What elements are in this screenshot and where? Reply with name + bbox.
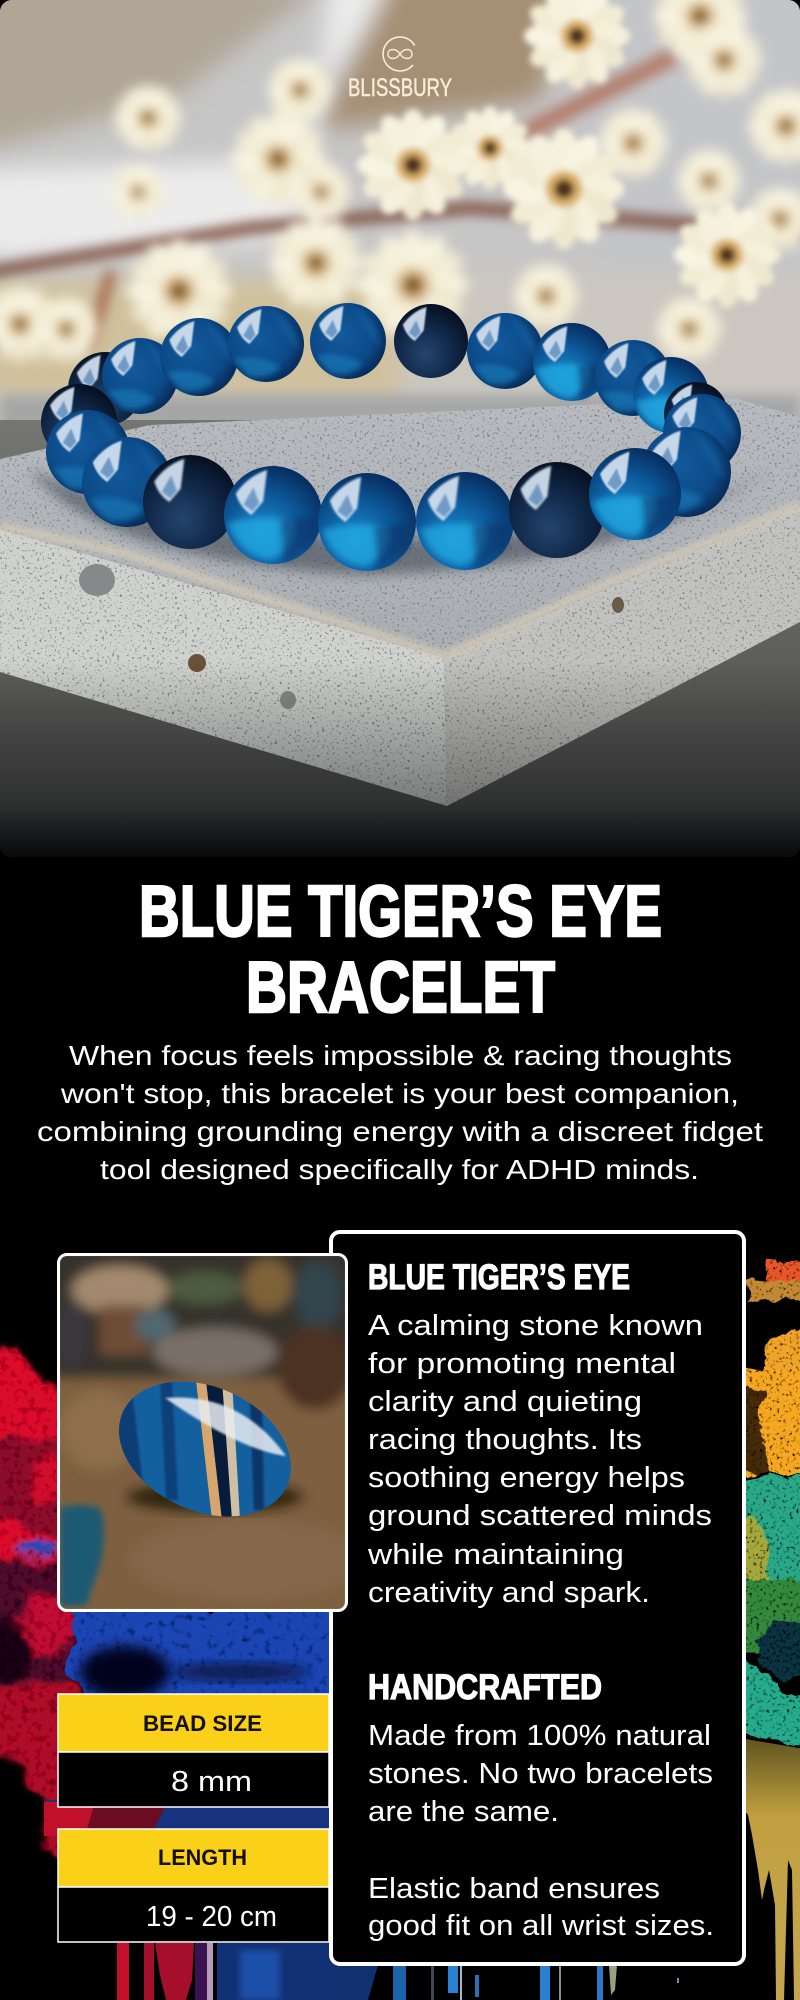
near flowers xyxy=(357,0,780,308)
intro paragraph: tool designed specifically for ADHD minds. xyxy=(100,1154,699,1185)
logo: Blissbury: BLISSBURY xyxy=(348,74,452,102)
text block: stone description: A calming stone known xyxy=(368,1310,703,1342)
stone shadow xyxy=(127,1482,303,1512)
hero photo: bracelet on stone xyxy=(0,0,800,860)
text block: handcrafted description: are the same. xyxy=(368,1796,559,1828)
text block: handcrafted description xyxy=(368,1720,714,1942)
text block: stone description: ground scattered minds xyxy=(368,1500,712,1532)
heading: Handcrafted: HANDCRAFTED xyxy=(368,1668,602,1707)
paint splash: right xyxy=(734,1262,800,2000)
heading: Blue Tiger's Eye: BLUE TIGER’S EYE xyxy=(368,1258,630,1297)
text block: handcrafted description: Made from 100% natural xyxy=(368,1720,711,1752)
small teal stone xyxy=(60,1505,104,1606)
text block: stone description: creativity and spark. xyxy=(368,1577,650,1609)
length label: LENGTH xyxy=(158,1845,247,1870)
text block: stone description: soothing energy helps xyxy=(368,1462,685,1494)
logo: Blissbury xyxy=(348,30,452,102)
blurred rocks xyxy=(60,1256,345,1609)
text block: stone description: racing thoughts. Its xyxy=(368,1424,642,1456)
paint drips: bottom xyxy=(117,1943,679,2000)
stone slab xyxy=(0,398,800,860)
blurred far flowers xyxy=(0,0,800,363)
inset photo: blue tiger's eye stone xyxy=(57,1253,348,1612)
bead size label xyxy=(58,1694,329,1752)
hero backdrop xyxy=(0,0,800,465)
title xyxy=(139,872,662,1028)
blurred branches xyxy=(0,58,800,345)
title: BLUE TIGER’S EYE xyxy=(139,872,662,952)
text block: stone description: for promoting mental xyxy=(368,1348,676,1380)
bead size value xyxy=(58,1752,329,1807)
text block: stone description xyxy=(367,1310,712,1609)
paint splash: blue band xyxy=(44,1606,345,1836)
text block: handcrafted description: good fit on all wrist sizes. xyxy=(368,1910,714,1942)
text block: handcrafted description: Elastic band ensures xyxy=(368,1873,660,1905)
length label xyxy=(58,1829,329,1887)
paint splash: left xyxy=(0,1350,80,1868)
bracelet xyxy=(41,303,741,571)
panel: description xyxy=(331,1232,744,1964)
bead size value: 8 mm xyxy=(171,1766,252,1798)
bead size label: BEAD SIZE xyxy=(143,1711,262,1736)
text block: stone description: clarity and quieting xyxy=(368,1386,642,1418)
intro paragraph: won't stop, this bracelet is your best companion, xyxy=(60,1078,739,1109)
bead shadow xyxy=(30,470,770,575)
intro paragraph xyxy=(37,1040,763,1185)
intro paragraph: When focus feels impossible & racing thoughts xyxy=(69,1040,732,1071)
length value xyxy=(58,1887,329,1942)
title: BRACELET xyxy=(246,948,555,1028)
bottom fade xyxy=(0,660,800,858)
blue stone xyxy=(119,1382,291,1516)
spec box: bead size xyxy=(58,1694,329,1807)
length value: 19 - 20 cm xyxy=(146,1901,277,1933)
text block: handcrafted description: stones. No two bracelets xyxy=(368,1758,713,1790)
spec box: length xyxy=(58,1829,329,1942)
text block: stone description: while maintaining xyxy=(367,1539,624,1571)
intro paragraph: combining grounding energy with a discreet fidget xyxy=(37,1116,763,1147)
